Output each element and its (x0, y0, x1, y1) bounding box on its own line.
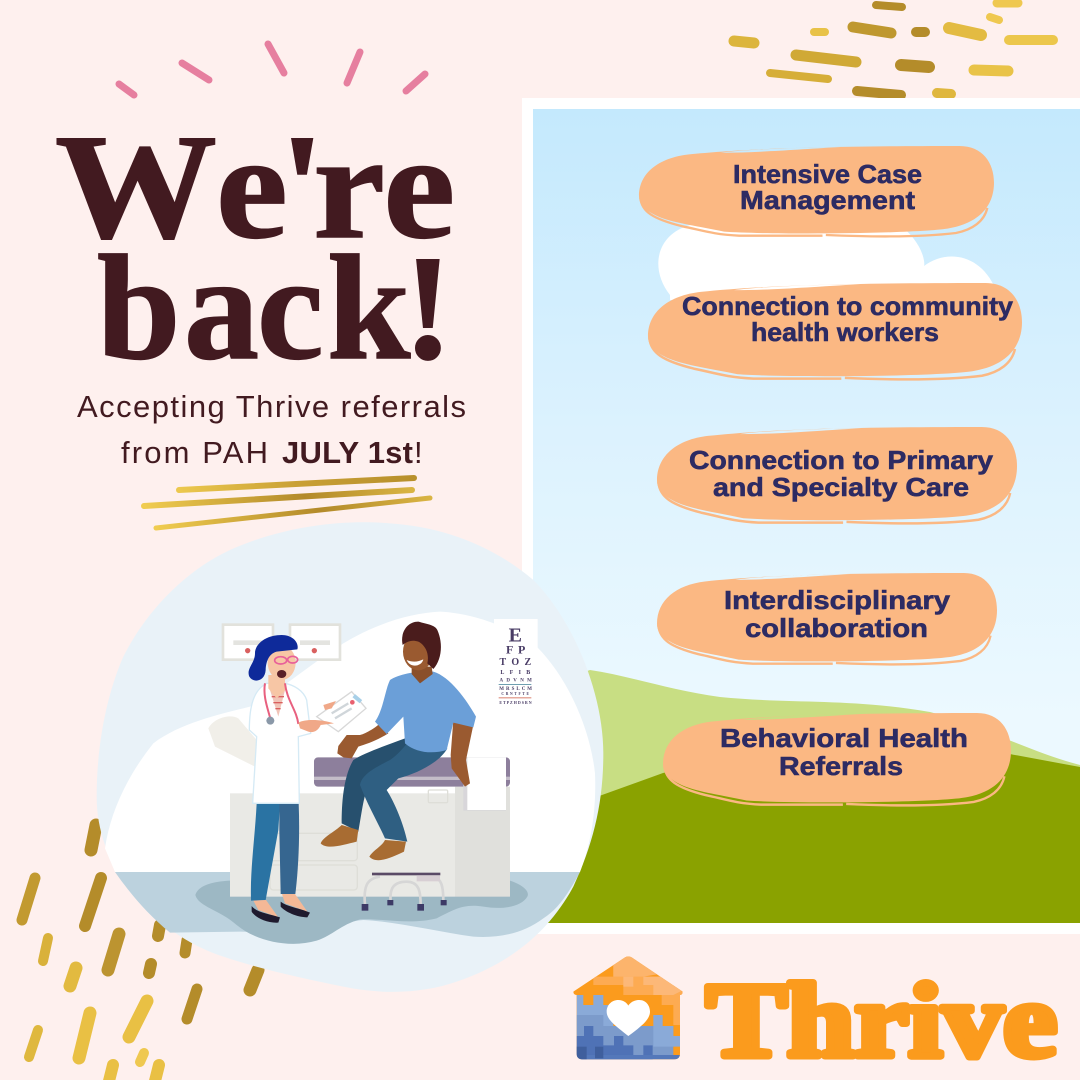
pill: Connection to Primary and Specialty Care: and Specialty Care (713, 472, 969, 502)
illustration: doctor and patient blob (97, 522, 603, 992)
title: back! (97, 225, 453, 391)
eye chart (494, 619, 538, 709)
blob background (97, 522, 603, 992)
pill: Interdisciplinary collaboration: collaboration (745, 613, 928, 643)
certificates (223, 625, 340, 660)
eye chart: ETPZHDSRN (499, 700, 533, 705)
white room (105, 612, 595, 872)
title (55, 103, 455, 391)
pill: Connection to Primary and Specialty Care (657, 427, 1017, 523)
pink sparkle rays (119, 44, 425, 95)
lamp (208, 716, 257, 767)
pill: Connection to Primary and Specialty Care: Connection to Primary (689, 445, 994, 475)
eye chart: LFIB (500, 670, 536, 676)
eye chart: CRNTFTE (501, 692, 531, 696)
pill: Behavioral Health Referrals: Behavioral Health (720, 723, 968, 753)
title: We're (55, 103, 455, 270)
eye chart: FP (506, 643, 530, 657)
floor (115, 872, 580, 937)
pill: Connection to community health workers: health workers (751, 317, 939, 347)
panel: landscape frame (522, 98, 1080, 934)
gold brush strokes: top right (734, 3, 1053, 95)
pill: Behavioral Health Referrals: Referrals (779, 751, 903, 781)
pill: Interdisciplinary collaboration (657, 573, 997, 664)
pill: Intensive Case Management: Management (740, 185, 915, 215)
subtitle: from PAH (121, 435, 268, 470)
pill: Connection to community health workers: Connection to community (682, 291, 1014, 321)
gold underline strokes (144, 478, 430, 528)
pill: Behavioral Health Referrals (663, 713, 1011, 805)
logo: Thrive house icon (573, 956, 683, 1060)
eye chart: E (509, 624, 522, 646)
pill: Intensive Case Management (639, 146, 994, 236)
figure: doctor (249, 635, 366, 923)
exam table (230, 757, 510, 897)
subtitle: JULY 1st (282, 435, 413, 470)
logo: Thrive wordmark: Thrive (706, 962, 1057, 1079)
gold brush strokes: bottom left (22, 825, 258, 1080)
eye chart: TOZ (500, 657, 536, 668)
subtitle (77, 389, 466, 470)
cloud (658, 225, 996, 300)
stool (365, 877, 443, 905)
pill: Interdisciplinary collaboration: Interdisciplinary (724, 585, 951, 615)
figure: patient (321, 622, 476, 860)
eye chart: ADVNM (499, 679, 535, 684)
dark green hill (533, 745, 1080, 923)
sky (533, 109, 1080, 923)
pill: Connection to community health workers (648, 283, 1022, 379)
light green hill (533, 670, 1080, 923)
eye chart: MRSLCM (499, 687, 534, 692)
pill: Intensive Case Management: Intensive Case (733, 159, 922, 189)
subtitle: Accepting Thrive referrals (77, 389, 466, 424)
floor shadow (195, 881, 528, 944)
subtitle: ! (414, 435, 423, 470)
